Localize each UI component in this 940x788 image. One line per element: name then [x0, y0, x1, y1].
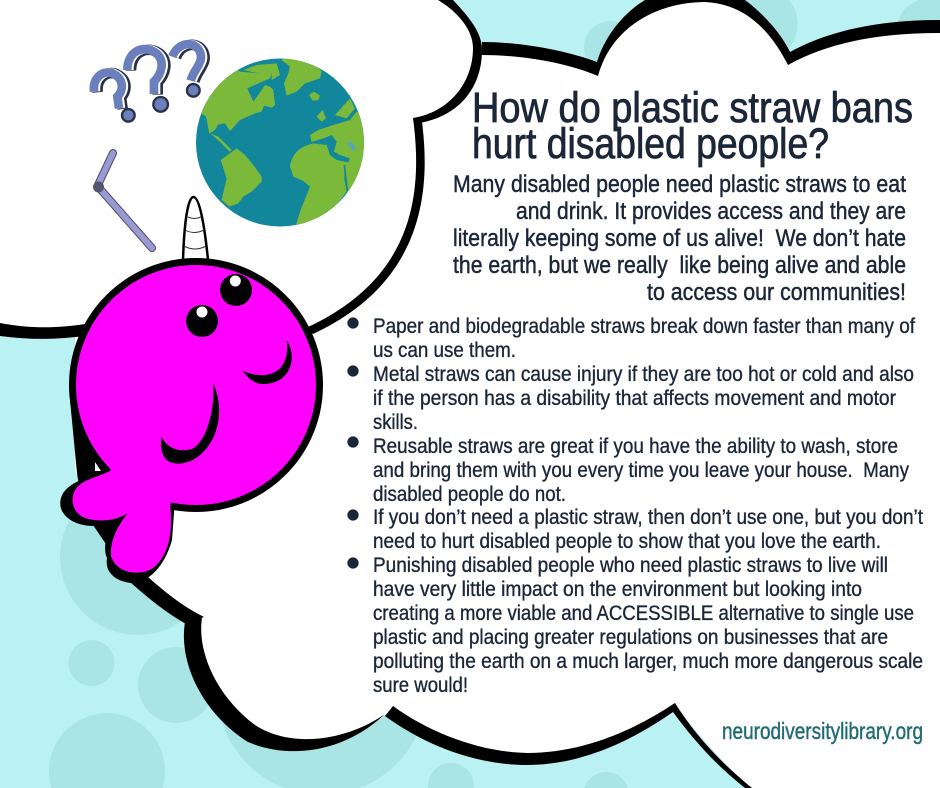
bullet: paper straws: us can use them. [373, 339, 516, 362]
bullet: don't need a straw: need to hurt disabled people to show that you love the earth. [373, 530, 881, 553]
narwhal horn [183, 197, 208, 260]
bullet: reusable straws: Reusable straws are great if you have the ability to wash, store [373, 435, 898, 458]
bullet: punishing disabled people: sure would! [373, 674, 468, 697]
bullet: reusable straws: disabled people do not. [373, 483, 566, 506]
icon: question marks [94, 44, 205, 122]
intro paragraph [453, 171, 906, 306]
intro paragraph: to access our communities! [647, 279, 906, 306]
title: hurt disabled people? [472, 120, 829, 168]
bullet: reusable straws [348, 435, 909, 506]
bullet: metal straws: if the person has a disability that affects movement and motor [373, 387, 896, 410]
bullet: paper straws [348, 315, 915, 362]
icon: narwhal character [60, 197, 320, 583]
bullet: punishing disabled people: plastic and placing greater regulations on businesses that are [373, 626, 888, 649]
narwhal fin and tail outline [60, 470, 175, 583]
bullet: don't need a straw [348, 506, 923, 553]
bullet: punishing disabled people [348, 554, 923, 697]
icon: earth globe [196, 58, 364, 226]
bullet: punishing disabled people: Punishing disabled people who need plastic straws to live will [373, 554, 888, 577]
icon: bent plastic straw [93, 153, 152, 248]
title [472, 84, 913, 168]
bullet list [348, 315, 923, 697]
narwhal body [72, 262, 320, 508]
bullet: metal straws: skills. [373, 411, 418, 434]
bullet: punishing disabled people: have very little impact on the environment but looking into [373, 578, 862, 601]
narwhal cheek crescents [161, 340, 292, 464]
narwhal eyes [186, 274, 252, 337]
narwhal fin and tail [73, 440, 190, 573]
bullet: metal straws [348, 363, 914, 434]
